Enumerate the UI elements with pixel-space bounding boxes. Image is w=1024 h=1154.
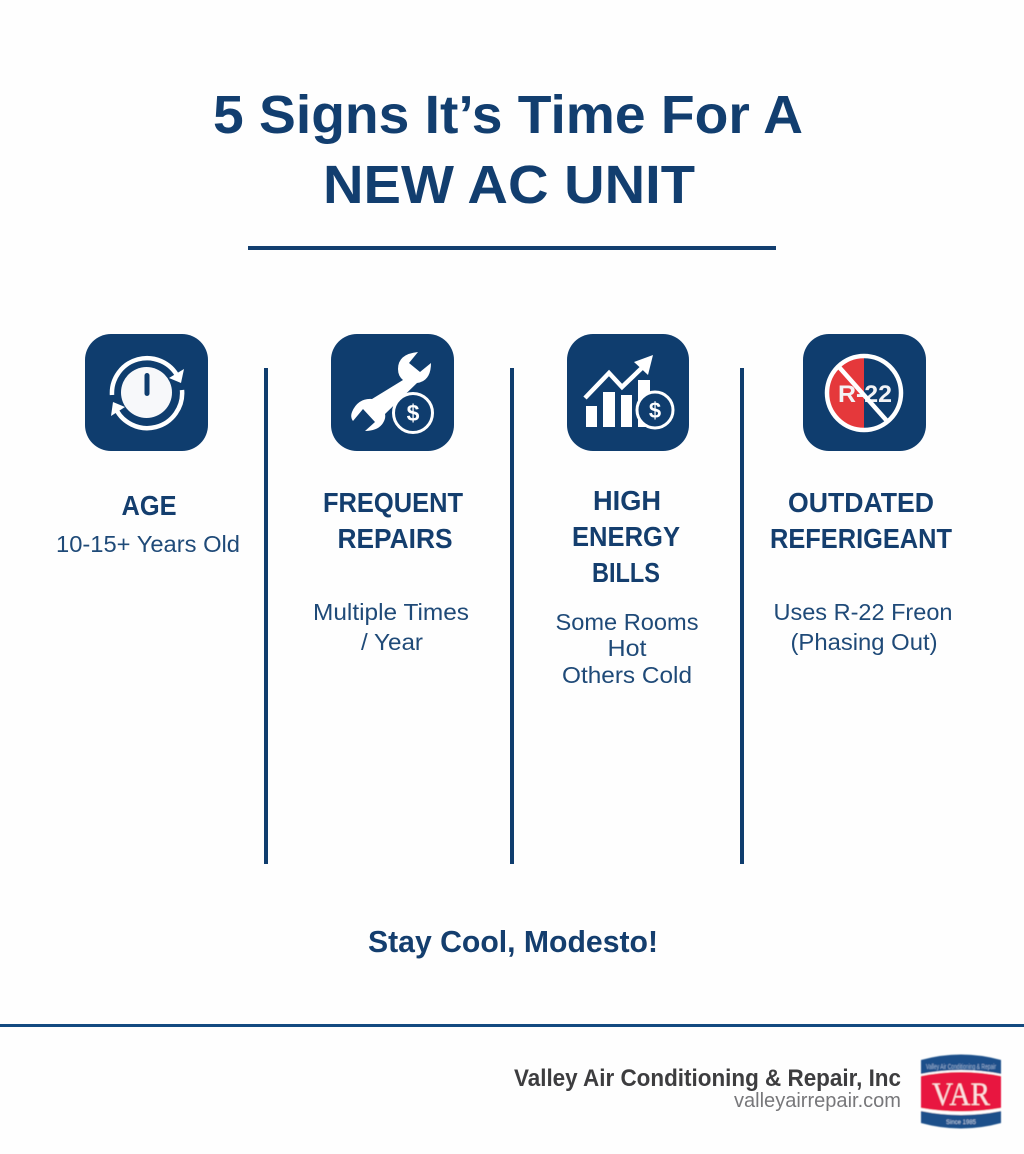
text: refrigerant detail: (Phasing Out) bbox=[790, 629, 938, 655]
text: bills detail: Hot bbox=[608, 635, 647, 661]
title: 5 Signs It’s Time For A bbox=[213, 85, 803, 145]
heading: age: AGE bbox=[122, 490, 176, 521]
logo bbox=[921, 1054, 1001, 1128]
title underline bbox=[248, 246, 776, 250]
icon: wrench and dollar coin: $ bbox=[407, 400, 420, 426]
panel: outdated refrigerant bbox=[770, 334, 952, 655]
tagline: Stay Cool, Modesto! bbox=[368, 924, 658, 959]
heading: outdated refrigerant bbox=[770, 487, 952, 554]
text: repairs detail bbox=[313, 599, 469, 655]
title bbox=[213, 85, 803, 215]
text: age detail: 10-15+ Years Old bbox=[56, 531, 240, 557]
panel: high energy bills bbox=[556, 334, 698, 688]
icon: wrench and dollar coin bbox=[331, 334, 454, 451]
text: refrigerant detail: Uses R-22 Freon bbox=[774, 599, 952, 625]
logo: VAR bbox=[932, 1077, 990, 1113]
icon: clock with cycle arrows bbox=[85, 334, 208, 451]
text: bills detail: Others Cold bbox=[562, 662, 692, 688]
text: repairs detail: Multiple Times bbox=[313, 599, 469, 625]
heading: high energy bills: ENERGY bbox=[572, 521, 680, 552]
footer: website: valleyairrepair.com bbox=[734, 1090, 901, 1112]
heading: outdated refrigerant: REFERIGEANT bbox=[770, 523, 952, 554]
text: bills detail: Some Rooms bbox=[556, 609, 698, 635]
heading: frequent repairs bbox=[323, 487, 463, 554]
heading: frequent repairs: REPAIRS bbox=[338, 523, 452, 554]
footer: company name: Valley Air Conditioning & Repair, Inc bbox=[514, 1065, 901, 1092]
divider bbox=[740, 368, 744, 864]
logo: Since 1985 bbox=[946, 1120, 977, 1126]
icon: rising chart and dollar coin: $ bbox=[649, 398, 661, 423]
icon: R-22 prohibited bbox=[803, 334, 926, 451]
logo: Valley Air Conditioning & Repair bbox=[926, 1064, 996, 1071]
divider bbox=[264, 368, 268, 864]
heading: high energy bills: HIGH bbox=[593, 485, 661, 516]
text: repairs detail: / Year bbox=[361, 629, 423, 655]
heading: frequent repairs: FREQUENT bbox=[323, 487, 463, 518]
icon: R-22 prohibited: R-22 bbox=[838, 381, 892, 408]
panel: frequent repairs bbox=[313, 334, 469, 655]
text: bills detail bbox=[556, 609, 698, 688]
title: NEW AC UNIT bbox=[323, 155, 695, 215]
panel: age bbox=[56, 334, 240, 557]
heading: outdated refrigerant: OUTDATED bbox=[788, 487, 934, 518]
heading: high energy bills: BILLS bbox=[592, 557, 660, 588]
footer rule bbox=[0, 1024, 1024, 1027]
heading: high energy bills bbox=[572, 485, 680, 588]
icon: rising chart and dollar coin bbox=[567, 334, 689, 451]
text: refrigerant detail bbox=[774, 599, 952, 655]
divider bbox=[510, 368, 514, 864]
